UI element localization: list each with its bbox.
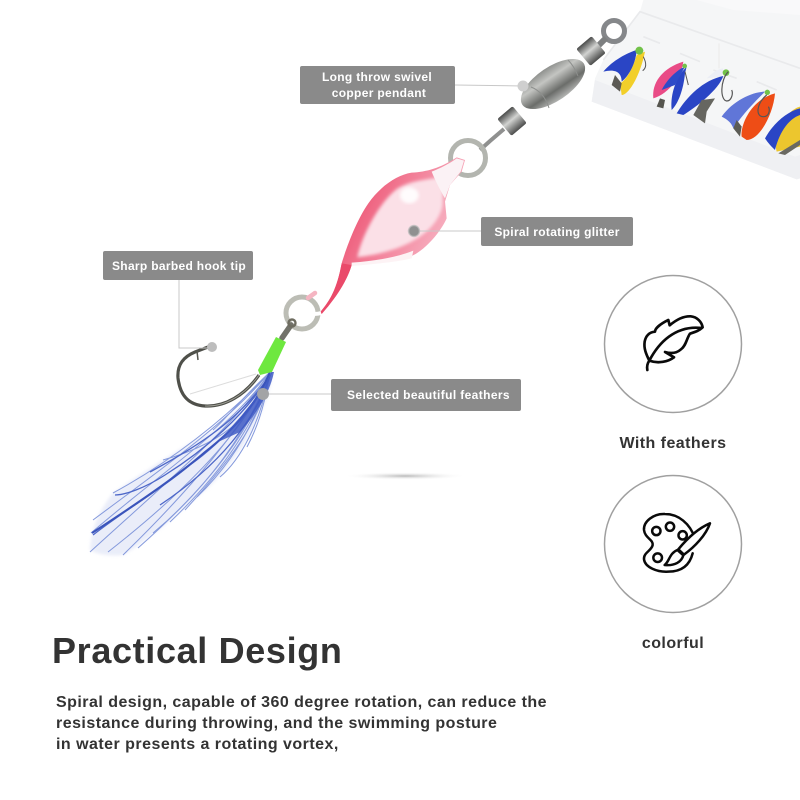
callout: feathers [331,379,521,411]
callout: swivel: copper pendant [332,86,426,100]
leader line: glitter [414,230,481,232]
eye loop [604,20,624,42]
label: colorful: colorful [642,635,704,652]
body text [56,694,547,753]
marker: hook [207,342,217,352]
label: with feathers: With feathers [619,435,727,452]
lure: yellow [603,47,646,95]
feather [90,372,274,555]
body with tail [321,157,465,314]
callout: swivel: Long throw swivel [322,70,432,84]
body text: in water presents a rotating vortex, [56,736,339,753]
lure: yellow right [765,107,800,155]
marker: swivel [518,80,528,92]
lure: blue white [677,43,732,123]
pale lower rim [352,251,413,266]
swivel copper pendant [480,20,624,150]
icon: palette in circle [604,476,742,612]
upper barrel [576,36,606,66]
callout: feathers: Selected beautiful feathers [347,388,510,402]
upper split ring [450,140,486,176]
tackle box with lures [592,0,800,179]
lure: orange [722,90,775,140]
callout: glitter [481,217,633,246]
shadow [343,472,467,480]
hook [178,320,296,406]
tail red edge [321,263,352,314]
callout: hook [103,251,253,280]
leader line: feather [263,393,331,395]
marker: feather [257,388,269,400]
leader line: hook [179,280,212,348]
callout: hook: Sharp barbed hook tip [112,259,246,273]
pale neck [432,158,464,198]
icon: feather in circle [604,276,742,412]
leader line: swivel [455,85,522,86]
marker: glitter [408,226,420,236]
body text: resistance during throwing, and the swimming posture [56,715,497,732]
lure: pink [653,62,688,110]
lower split ring [286,293,321,329]
callout: swivel [300,66,455,104]
spiral rotating lure [321,157,465,314]
lower barrel [497,106,527,136]
title: Practical Design [52,630,343,671]
lead body [513,49,593,119]
highlight [400,187,419,203]
callout: glitter: Spiral rotating glitter [494,225,620,239]
green thread wrap [258,337,286,375]
inner pale area [357,177,443,257]
body text: Spiral design, capable of 360 degree rotation, can reduce the [56,694,547,711]
